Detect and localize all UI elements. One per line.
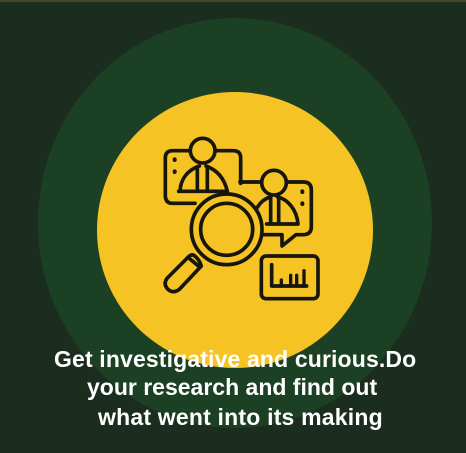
caption text: Get investigative and curious.Do bbox=[54, 346, 416, 372]
outer green circle bbox=[38, 18, 432, 428]
top edge strip bbox=[0, 0, 466, 2]
yellow circle bbox=[97, 92, 373, 368]
icon: right profile card bbox=[240, 170, 311, 246]
caption text bbox=[54, 346, 416, 430]
icon: bar chart card bbox=[261, 256, 318, 299]
icon: research magnifier with people and chart bbox=[165, 138, 318, 299]
icon: left profile card bbox=[165, 138, 241, 203]
icon: magnifying glass bbox=[165, 194, 262, 292]
caption text: your research and find out bbox=[87, 374, 377, 400]
caption text: what went into its making bbox=[98, 404, 383, 430]
